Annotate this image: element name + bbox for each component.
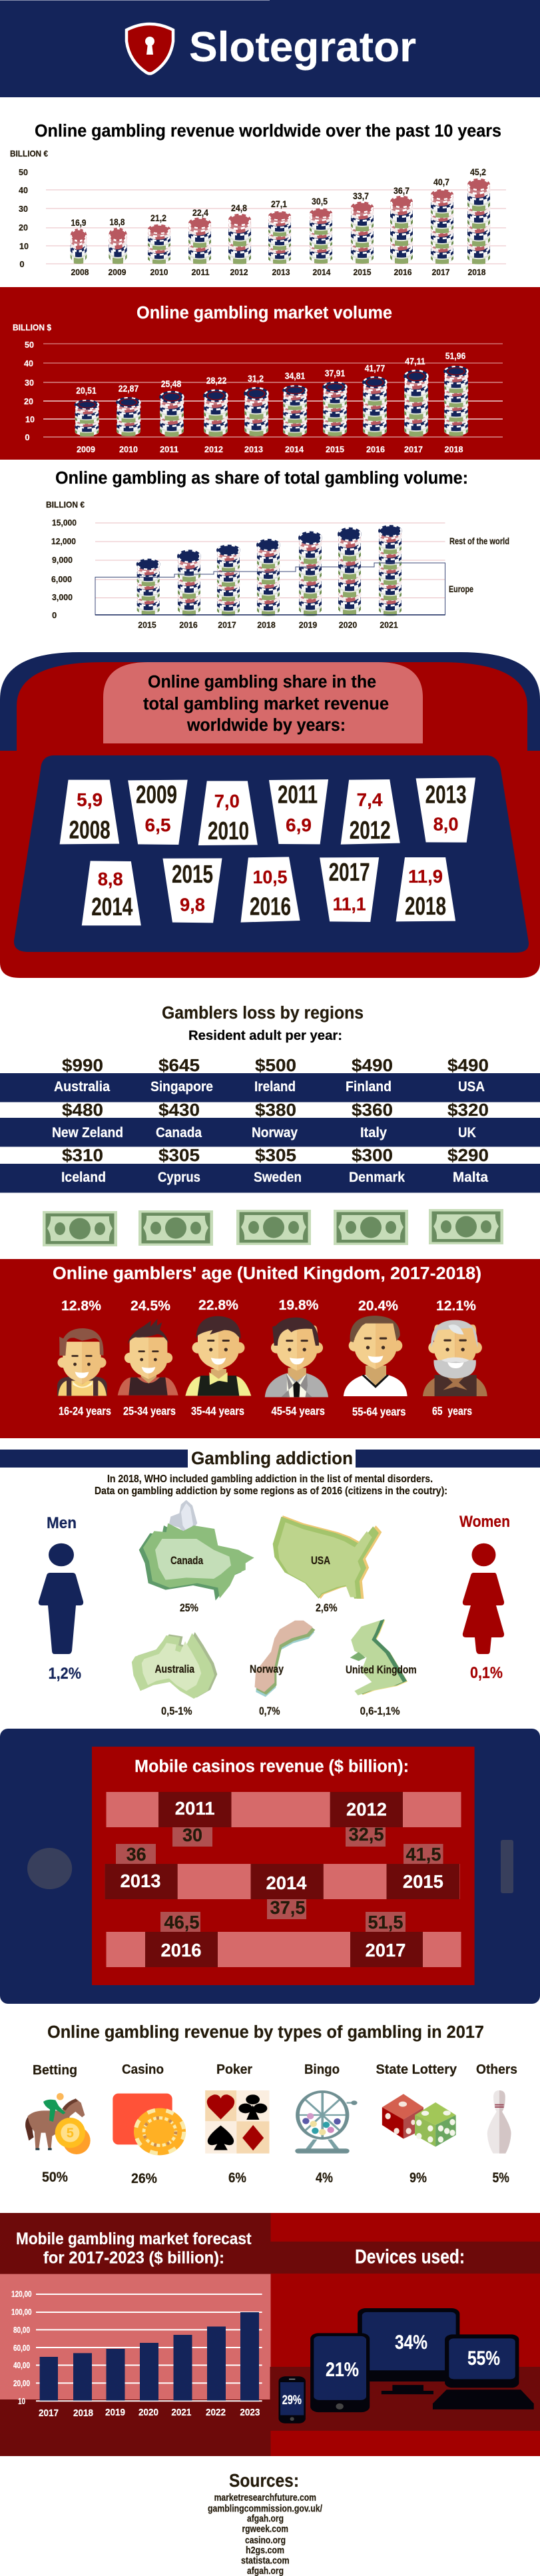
values: 24,8 — [231, 203, 247, 213]
card values: 10,5 — [253, 867, 288, 887]
card values: 5,9 — [77, 789, 103, 810]
years: 2011 — [175, 1798, 215, 1819]
year labels: 2019 — [105, 2407, 125, 2418]
icon: bingo wheel — [295, 2092, 358, 2154]
y axis labels — [51, 518, 77, 620]
year labels — [138, 620, 398, 630]
panel: mobile gambling market forecast — [0, 2213, 270, 2456]
year labels: 2014 — [313, 267, 331, 277]
men figure — [39, 1514, 83, 1683]
card years: 2013 — [425, 781, 467, 809]
women figure: Women — [459, 1513, 510, 1531]
europe outline — [95, 563, 445, 615]
percentages: 5% — [493, 2170, 509, 2186]
heading: Mobile gambling market forecast — [16, 2230, 252, 2248]
chip stacks — [70, 179, 491, 264]
card years: 2015 — [172, 861, 213, 889]
intro text — [95, 1474, 447, 1497]
source list — [208, 2493, 322, 2576]
age labels: 25-34 years — [123, 1404, 176, 1418]
year labels: 2010 — [119, 444, 138, 454]
year labels: 2013 — [244, 444, 263, 454]
year labels: 2012 — [230, 267, 248, 277]
card values: 11,9 — [408, 866, 443, 887]
year labels: 2015 — [326, 444, 344, 454]
age labels — [59, 1404, 472, 1418]
percentages: 12.8% — [61, 1298, 101, 1314]
card years: 2018 — [405, 893, 446, 921]
amounts: $300 — [352, 1145, 393, 1165]
card years: 2012 — [350, 817, 391, 845]
y axis labels: 50 — [25, 340, 34, 350]
amounts: $430 — [158, 1100, 200, 1120]
country names: Norway — [252, 1125, 298, 1140]
axis unit: BILLION € — [10, 149, 48, 159]
country names: Iceland — [61, 1170, 106, 1185]
type names: State Lottery — [376, 2062, 457, 2077]
phone home button — [27, 1848, 72, 1889]
year labels: 2017 — [431, 267, 450, 277]
values: 46,5 — [164, 1912, 200, 1932]
years: 2016 — [161, 1940, 201, 1960]
year cards — [60, 777, 475, 925]
year labels: 2011 — [192, 267, 209, 277]
y axis labels: 40 — [19, 185, 28, 195]
sources — [208, 2470, 322, 2576]
country names: Canada — [156, 1125, 202, 1140]
years: 2012 — [346, 1799, 387, 1820]
percentages: 22.8% — [198, 1298, 238, 1313]
percentages: 9% — [409, 2170, 427, 2186]
year labels: 2018 — [445, 444, 463, 454]
age labels: 45-54 years — [272, 1404, 325, 1418]
series labels: Rest of the world — [449, 536, 509, 546]
icon: card suits — [205, 2090, 269, 2154]
type names — [33, 2062, 517, 2078]
values: 45,2 — [470, 167, 486, 177]
intro text: Data on gambling addiction by some regions as of 2016 (citizens in the coutry): — [95, 1486, 447, 1497]
icon: shield keyhole logo — [127, 24, 173, 73]
phone screen — [92, 1747, 475, 1985]
axis labels: 10 — [18, 2397, 25, 2406]
source list: statista.com — [241, 2555, 289, 2566]
amounts: $305 — [255, 1145, 296, 1165]
years: 2017 — [365, 1940, 406, 1960]
values: 30 — [182, 1825, 202, 1845]
card values: 6,9 — [286, 815, 312, 835]
values: 36 — [127, 1844, 146, 1865]
icon: casino chip — [113, 2094, 186, 2155]
map: Norway: Norway — [250, 1663, 284, 1675]
years: 2013 — [120, 1871, 161, 1891]
panel: phone with mobile casinos revenue — [0, 1729, 540, 2004]
panel: slot machine share by year — [0, 652, 540, 978]
year labels: 2015 — [353, 267, 372, 277]
y axis labels: 0 — [52, 610, 57, 620]
amounts: $380 — [255, 1100, 296, 1120]
heading: Online gambling market volume — [136, 304, 392, 322]
values: 41,77 — [365, 364, 385, 373]
values: 27,1 — [271, 199, 287, 209]
y axis labels: 12,000 — [51, 536, 76, 546]
country names — [52, 1079, 488, 1185]
y axis labels: 15,000 — [52, 518, 77, 528]
source list: gamblingcommission.gov.uk/ — [208, 2504, 322, 2515]
values: 28,22 — [206, 376, 226, 386]
country names: UK — [458, 1125, 476, 1140]
values — [127, 1824, 441, 1932]
map: United Kingdom: United Kingdom — [346, 1663, 417, 1676]
amounts: $500 — [255, 1055, 296, 1075]
year labels: 2012 — [204, 444, 223, 454]
icon: horse and coin — [25, 2093, 91, 2154]
year labels: 2017 — [404, 444, 423, 454]
axis labels: 20,00 — [13, 2379, 30, 2388]
values: 41,5 — [406, 1844, 441, 1865]
year labels: 2019 — [299, 620, 317, 630]
y axis labels: 40 — [24, 358, 33, 368]
year labels — [39, 2407, 260, 2419]
values — [71, 167, 486, 228]
device shares: 55% — [467, 2348, 500, 2369]
series labels: Europe — [449, 584, 473, 594]
y axis labels: 0 — [19, 259, 25, 269]
year labels: 2016 — [394, 267, 411, 277]
card values: 11,1 — [333, 894, 366, 915]
section: gambling addiction — [0, 1448, 540, 1717]
brand name: Slotegrator — [189, 24, 416, 71]
machine reels panel — [14, 755, 529, 953]
icon: person 25-34 — [118, 1318, 178, 1396]
country names: Cyprus — [158, 1170, 200, 1185]
card years: 2010 — [208, 817, 249, 845]
country names: Denmark — [349, 1170, 405, 1185]
values: 20,51 — [76, 386, 97, 396]
country names: Singapore — [150, 1079, 213, 1094]
amounts: $645 — [158, 1055, 200, 1075]
amounts: $360 — [352, 1100, 393, 1120]
age labels: 65 years — [432, 1404, 472, 1418]
heading plate: total gambling market revenue — [143, 695, 389, 713]
icon: person 35-44 — [185, 1316, 251, 1396]
year labels: 2018 — [467, 267, 486, 277]
year labels: 2016 — [366, 444, 385, 454]
chip stacks — [136, 525, 403, 616]
table: loss by country — [0, 1055, 540, 1192]
axis labels: 60,00 — [13, 2344, 30, 2353]
percentages: 20.4% — [358, 1298, 398, 1314]
country names: New Zeland — [52, 1125, 123, 1140]
y axis labels — [19, 167, 29, 269]
year labels: 2009 — [108, 267, 127, 277]
age labels: 35-44 years — [191, 1404, 244, 1418]
y axis labels: 20 — [24, 396, 33, 406]
bar chart — [11, 2290, 262, 2419]
icon: person 45-54 — [265, 1318, 328, 1397]
year labels: 2020 — [138, 2407, 158, 2418]
year labels: 2017 — [39, 2407, 59, 2419]
y axis labels: 6,000 — [51, 574, 72, 584]
women figure: 0,1% — [470, 1664, 503, 1682]
values: 25,48 — [161, 379, 182, 389]
percentages: 12.1% — [436, 1298, 476, 1314]
row bars — [105, 1792, 461, 1967]
panel: devices used — [270, 2213, 540, 2456]
device shares — [282, 2332, 500, 2407]
y axis labels: 20 — [19, 222, 28, 232]
card values: 8,8 — [98, 869, 123, 889]
years — [120, 1798, 443, 1960]
y axis labels: 9,000 — [52, 555, 73, 565]
year labels: 2009 — [77, 444, 95, 454]
percentages: 24.5% — [131, 1298, 170, 1314]
amounts: $320 — [447, 1100, 489, 1120]
axis unit: BILLION € — [46, 500, 85, 510]
country names: Finland — [346, 1079, 392, 1094]
heading plate: worldwide by years: — [186, 716, 346, 735]
map: United Kingdom: 0,6-1,1% — [360, 1705, 400, 1717]
type names: Betting — [33, 2063, 77, 2078]
map: USA: USA — [311, 1554, 330, 1567]
phone side button — [501, 1840, 513, 1893]
device shares: 21% — [326, 2359, 359, 2381]
values: 22,4 — [192, 208, 208, 218]
axis labels — [11, 2290, 32, 2406]
type names: Casino — [122, 2062, 164, 2077]
percentages — [42, 2170, 509, 2186]
values: 51,5 — [368, 1912, 404, 1932]
values: 36,7 — [394, 186, 409, 196]
values: 40,7 — [433, 177, 449, 187]
icon: devices — [278, 2308, 534, 2423]
values: 34,81 — [285, 371, 306, 381]
axis labels: 80,00 — [13, 2326, 30, 2335]
icons: banknotes — [43, 1209, 503, 1246]
years: 2015 — [403, 1871, 443, 1892]
values: 16,9 — [71, 218, 87, 228]
heading plate — [103, 662, 423, 743]
section: gambling types — [25, 2062, 517, 2186]
year labels: 2010 — [150, 267, 168, 277]
map: Australia: Australia — [154, 1663, 194, 1675]
year labels: 2011 — [160, 444, 178, 454]
values: 37,91 — [325, 368, 346, 378]
amounts: $480 — [62, 1100, 103, 1120]
icon: person 65 — [423, 1320, 487, 1396]
year labels: 2021 — [380, 620, 398, 630]
men figure: 1,2% — [48, 1665, 81, 1683]
chart: online gambling revenue stacks — [10, 149, 506, 277]
icon: horse and coin: 5 — [67, 2126, 74, 2141]
icon: bowling pin — [487, 2090, 511, 2154]
values: 33,7 — [353, 191, 369, 201]
country names: Malta — [453, 1170, 488, 1185]
map: USA — [273, 1515, 382, 1614]
values — [76, 351, 466, 396]
percentages: 50% — [42, 2170, 68, 2185]
values: 30,5 — [312, 197, 328, 207]
year labels — [71, 267, 486, 277]
map: United Kingdom — [346, 1619, 417, 1717]
source list: h2gs.com — [246, 2545, 284, 2556]
panel: gamblers' age — [0, 1259, 540, 1438]
country names: Australia — [54, 1079, 110, 1094]
heading: Devices used: — [355, 2246, 465, 2268]
map: Australia — [132, 1632, 217, 1717]
percentages: 6% — [228, 2170, 246, 2186]
values: 22,87 — [119, 384, 138, 394]
axis labels: 100,00 — [11, 2308, 32, 2317]
amounts: $310 — [62, 1145, 103, 1165]
heading: revenue by types: Online gambling revenue by types of gambling in 2017 — [47, 2023, 484, 2042]
intro text: In 2018, WHO included gambling addiction in the list of mental disorders. — [107, 1474, 433, 1485]
card years: 2009 — [136, 781, 177, 809]
card years: 2016 — [250, 893, 291, 921]
type names: Poker — [216, 2062, 252, 2077]
heading plate: Online gambling share in the — [148, 673, 376, 691]
card years: 2011 — [278, 781, 318, 809]
heading: Mobile casinos revenue ($ billion): — [135, 1757, 409, 1776]
icon: person 55-64 — [344, 1316, 407, 1396]
year labels: 2021 — [171, 2407, 191, 2418]
card values: 7,0 — [214, 791, 240, 811]
axis labels: 120,00 — [11, 2290, 32, 2299]
year labels: 2015 — [138, 620, 156, 630]
chart: share of total gambling — [46, 500, 509, 630]
percentages: 19.8% — [278, 1298, 319, 1313]
source list: casino.org — [245, 2535, 286, 2546]
y axis labels: 10 — [25, 414, 35, 424]
axis unit: BILLION $ — [13, 323, 51, 332]
amounts: $990 — [62, 1055, 103, 1075]
year labels: 2018 — [257, 620, 276, 630]
year labels: 2018 — [73, 2407, 93, 2419]
country names: USA — [458, 1079, 485, 1094]
year labels: 2016 — [179, 620, 198, 630]
source list: afgah.org — [247, 2514, 284, 2525]
map: Australia: 0,5-1% — [161, 1705, 192, 1717]
card years — [69, 781, 467, 921]
card years: 2017 — [329, 859, 370, 887]
year labels — [77, 444, 463, 454]
map: Norway: 0,7% — [259, 1705, 280, 1717]
year labels: 2020 — [339, 620, 357, 630]
values: 37,5 — [270, 1897, 305, 1918]
y axis labels: 3,000 — [52, 592, 73, 602]
y axis labels: 10 — [19, 241, 29, 251]
age labels: 16-24 years — [59, 1404, 111, 1418]
subheading: Resident adult per year: — [188, 1029, 342, 1043]
values: 32,5 — [349, 1824, 384, 1845]
percentages: 26% — [131, 2171, 157, 2186]
heading: Online gamblers' age (United Kingdom, 2017-2018) — [53, 1264, 481, 1283]
country names: Italy — [360, 1125, 387, 1140]
amounts: $290 — [447, 1145, 489, 1165]
women figure — [459, 1513, 510, 1682]
amounts: $490 — [352, 1055, 393, 1075]
y axis labels: 30 — [25, 378, 34, 388]
heading: share of total volume: Online gambling as share of total gambling volume: — [55, 469, 468, 488]
y axis labels: 0 — [25, 432, 30, 442]
values: 18,8 — [109, 217, 125, 227]
values: 47,11 — [405, 356, 425, 366]
map: Canada: 25% — [180, 1601, 198, 1614]
amounts: $490 — [447, 1055, 489, 1075]
y axis labels: 50 — [19, 167, 28, 177]
source list: marketresearchfuture.com — [214, 2493, 316, 2503]
map: USA: 2,6% — [316, 1601, 337, 1614]
type names: Others — [476, 2062, 517, 2077]
heading with bars — [0, 1448, 540, 1468]
type names: Bingo — [304, 2062, 340, 2077]
device shares: 29% — [282, 2393, 302, 2407]
heading — [16, 2230, 252, 2268]
panel: online gambling market volume — [0, 287, 540, 460]
card values: 7,4 — [357, 789, 383, 810]
card values: 9,8 — [180, 895, 205, 915]
age labels: 55-64 years — [352, 1405, 406, 1418]
series labels — [449, 536, 509, 594]
percentages — [61, 1298, 476, 1314]
values: 31,2 — [248, 374, 264, 384]
y axis labels — [24, 340, 35, 442]
year labels: 2022 — [206, 2407, 226, 2418]
map: Norway — [250, 1621, 315, 1717]
heading: for 2017-2023 ($ billion): — [43, 2249, 224, 2268]
icon: person 16-24 — [57, 1328, 107, 1396]
country names: Ireland — [254, 1079, 296, 1094]
card values: 6,5 — [145, 815, 170, 835]
amounts — [62, 1055, 489, 1165]
country names: Sweden — [254, 1170, 302, 1185]
source list: rgweek.com — [242, 2524, 288, 2535]
chip stacks — [75, 366, 469, 436]
amounts: $305 — [158, 1145, 200, 1165]
axis labels: 40,00 — [13, 2361, 30, 2370]
map: Canada — [139, 1500, 254, 1614]
years: 2014 — [266, 1873, 307, 1893]
values: 51,96 — [445, 351, 466, 361]
card values — [77, 789, 459, 915]
year labels: 2017 — [218, 620, 236, 630]
card years: 2008 — [69, 817, 111, 845]
y axis labels: 30 — [19, 204, 28, 214]
card years: 2014 — [91, 893, 133, 921]
men figure: Men — [47, 1514, 77, 1532]
year labels: 2013 — [272, 267, 290, 277]
heading: gamblers loss: Gamblers loss by regions — [162, 1004, 364, 1023]
map: Canada: Canada — [170, 1554, 203, 1567]
heading with bars: Gambling addiction — [191, 1448, 353, 1468]
device shares: 34% — [395, 2332, 427, 2354]
year labels: 2023 — [240, 2407, 260, 2418]
icon: dice — [382, 2094, 456, 2147]
header: logo banner — [0, 0, 540, 97]
percentages: 4% — [316, 2170, 333, 2186]
card values: 8,0 — [433, 814, 459, 835]
values: 21,2 — [150, 213, 166, 223]
heading: revenue worldwide: Online gambling revenue worldwide over the past 10 years — [35, 122, 501, 141]
year labels: 2014 — [285, 444, 304, 454]
year labels: 2008 — [71, 267, 89, 277]
heading: Sources: — [229, 2470, 299, 2491]
